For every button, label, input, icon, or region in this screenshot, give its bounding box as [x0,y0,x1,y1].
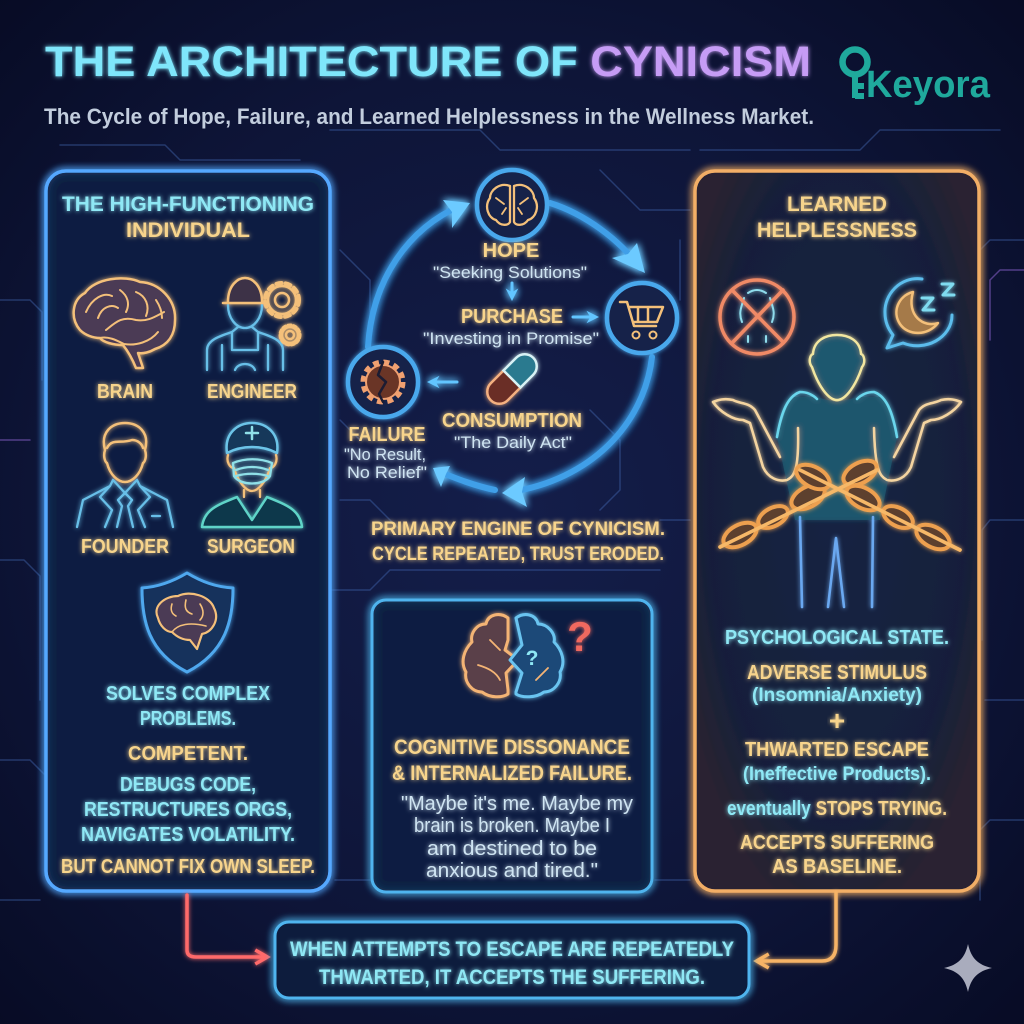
node: failure text: FAILURE [348,424,426,446]
text: psychological state: PSYCHOLOGICAL STATE. [725,627,949,649]
text: solves complex problems [106,683,271,730]
panel heading: THE HIGH-FUNCTIONING [62,192,314,216]
text: thwarted escape: THWARTED ESCAPE [745,739,929,761]
node: failure text: No Relief" [347,464,427,482]
text: debugs code: NAVIGATES VOLATILITY. [81,824,295,846]
text: accepts suffering [740,832,934,878]
icon: chains [719,456,960,554]
plus sign: + [829,705,845,736]
node: purchase text [423,306,599,348]
panel heading: INDIVIDUAL [126,218,250,242]
node: failure text: "No Result, [344,446,426,464]
quote text: brain is broken. Maybe I [414,815,610,837]
heading: cognitive dissonance: & INTERNALIZED FAILURE. [392,762,632,785]
text: accepts suffering: ACCEPTS SUFFERING [740,832,934,854]
label: surgeon: SURGEON [207,535,295,558]
panel: the high-functioning individual [46,171,330,891]
icon: moon and zzz [885,279,954,348]
node: purchase cart icon [607,283,677,353]
node: consumption text: CONSUMPTION [442,410,582,432]
title: THE ARCHITECTURE OF CYNICISM [45,39,811,86]
text: competent: COMPETENT. [128,743,248,765]
panel heading [757,192,917,242]
text: accepts suffering: AS BASELINE. [772,856,902,878]
panel heading: LEARNED [787,192,887,216]
logo: Keyora: Keyora [866,64,991,106]
label: founder: FOUNDER [81,535,169,558]
arrow: red to conclusion [187,895,264,957]
panel heading [62,192,314,242]
icon: split brain with question mark: ? [567,613,593,660]
text: but cannot fix own sleep: BUT CANNOT FIX OWN SLEEP. [61,856,315,878]
icon: prohibited [720,280,794,354]
callout: conclusion [275,922,749,998]
figure: shrugging person [713,335,961,607]
arrow: orange to conclusion [760,893,836,961]
quote text: am destined to be [427,838,597,860]
quote text: "Maybe it's me. Maybe my [401,793,633,815]
text: debugs code: DEBUGS CODE, [120,774,256,796]
text: eventually stops trying: eventually STOPS TRYING. [727,798,947,820]
panel: learned helplessness [695,171,979,891]
label: brain: BRAIN [97,380,153,403]
quote text [401,793,633,882]
text: solves complex problems: SOLVES COMPLEX [106,683,271,705]
icon: split brain with question mark [463,613,593,697]
label: engineer: ENGINEER [207,380,297,403]
node: hope icon [477,170,547,240]
panel heading: HELPLESSNESS [757,218,917,242]
logo: Keyora [842,50,991,106]
text: primary engine of cynicism [371,518,665,565]
node: hope text: HOPE [483,240,539,262]
text: thwarted escape [743,739,931,785]
icon: engineer [207,278,300,370]
node: hope text: "Seeking Solutions" [433,264,587,282]
callout: conclusion: WHEN ATTEMPTS TO ESCAPE ARE REPEATEDLY [290,938,734,961]
text: primary engine of cynicism: PRIMARY ENGINE OF CYNICISM. [371,518,665,540]
icon: surgeon [202,423,302,527]
node: failure icon [348,347,418,417]
node: failure text [344,424,427,482]
text: debugs code: RESTRUCTURES ORGS, [84,799,292,821]
text: primary engine of cynicism: CYCLE REPEATED, TRUST ERODED. [372,543,664,565]
callout: conclusion: THWARTED, IT ACCEPTS THE SUFFERING. [319,966,705,989]
text: thwarted escape: (Ineffective Products). [743,764,931,785]
heading: cognitive dissonance: COGNITIVE DISSONANCE [394,736,630,759]
icon: founder [77,423,173,527]
cycle arrows [368,200,652,507]
node: hope text [433,240,587,282]
icon: sparkle watermark [944,944,992,992]
heading: cognitive dissonance [392,736,632,785]
panel: cognitive dissonance [372,600,652,892]
icon: shield with brain [142,573,233,672]
arrow: red to dissonance [302,740,360,744]
node: purchase text: "Investing in Promise" [423,330,599,348]
node: consumption text [442,410,582,452]
text: solves complex problems: PROBLEMS. [140,708,236,730]
subtitle: The Cycle of Hope, Failure, and Learned Helplessness in the Wellness Market. [44,104,814,129]
icon: brain [74,278,175,368]
icon: split brain with question mark: ? [526,647,538,670]
node: purchase text: PURCHASE [461,306,563,328]
quote text: anxious and tired." [426,860,598,882]
node: consumption text: "The Daily Act" [454,434,572,452]
text: adverse stimulus: ADVERSE STIMULUS [747,662,927,684]
text: adverse stimulus [747,662,927,706]
text: debugs code [81,774,295,846]
icon: pill [482,349,542,409]
text: adverse stimulus: (Insomnia/Anxiety) [752,685,922,706]
cycle diagram [344,170,677,565]
